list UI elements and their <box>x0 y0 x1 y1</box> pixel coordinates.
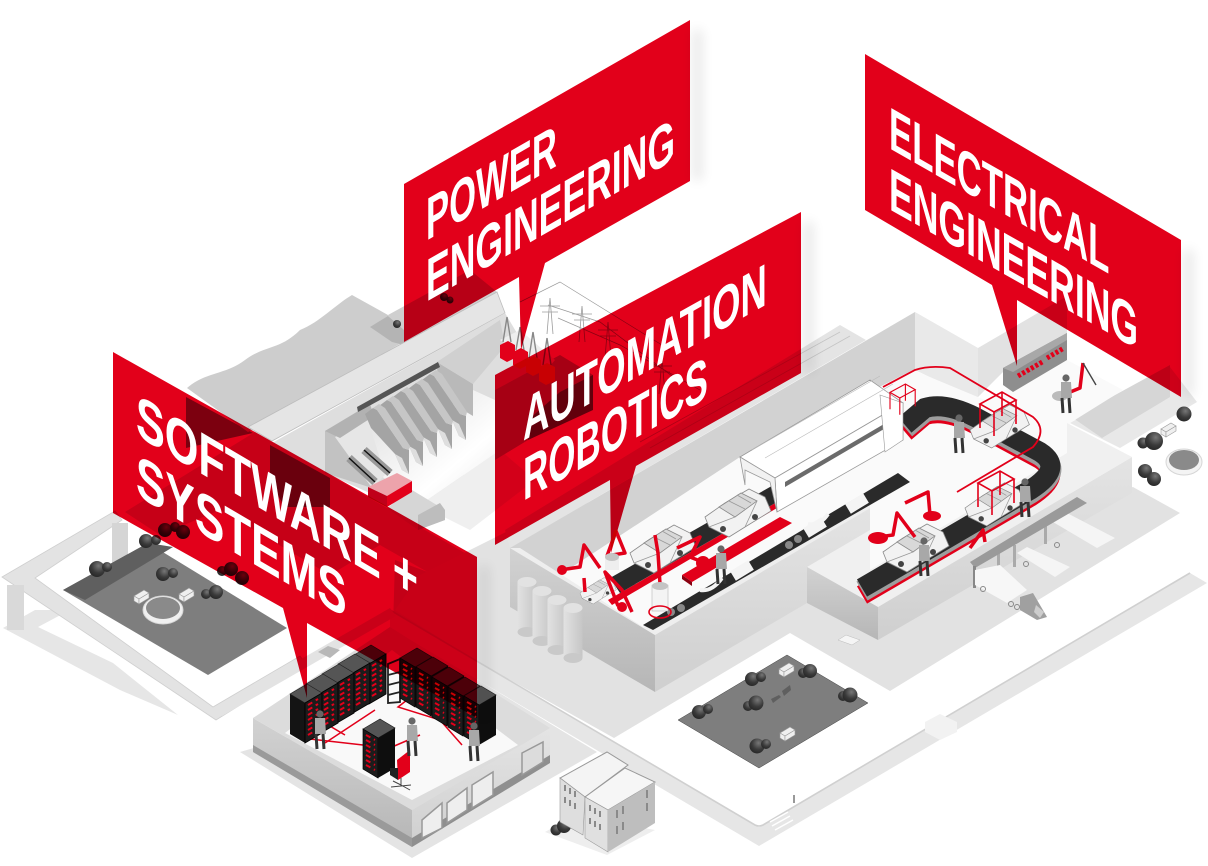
left wall <box>253 718 412 847</box>
staff <box>315 710 326 749</box>
perimeter road <box>390 573 1207 846</box>
silos <box>518 577 582 663</box>
heading: automation robotics: AUTOMATION <box>523 250 767 454</box>
ground under software banner <box>125 397 477 700</box>
right block <box>585 768 655 810</box>
parked car <box>318 646 340 658</box>
banner: software + systems <box>113 352 477 718</box>
robot arms hall A <box>560 531 705 612</box>
racks left row <box>354 645 386 704</box>
heading: electrical engineering: ENGINEERING <box>889 155 1138 363</box>
factory floor <box>560 360 1123 627</box>
left block <box>560 752 628 797</box>
heading: power engineering: ENGINEERING <box>426 104 675 315</box>
conveyor loop <box>862 406 1050 595</box>
substation and power lines <box>500 282 700 394</box>
tunnel <box>740 376 903 512</box>
conveyor: assembly line with car bodies <box>580 483 777 605</box>
heading: software + systems: SYSTEMS <box>136 441 347 631</box>
factory outer walls <box>510 423 1132 692</box>
office chair <box>390 750 411 790</box>
right wall <box>412 728 550 847</box>
vehicles on loop <box>883 405 1029 572</box>
heading: software + systems: SOFTWARE + <box>136 381 418 614</box>
road across dam <box>248 292 505 441</box>
garage doors <box>422 803 442 838</box>
petrol station <box>970 497 1115 603</box>
truck <box>1008 593 1047 620</box>
tunnel end cap <box>880 395 903 452</box>
open frame <box>388 659 400 703</box>
banner edge shadows <box>481 30 1192 716</box>
robot bases hall A <box>557 545 727 618</box>
overhead rail and cages <box>883 367 1040 515</box>
left road loop and ramp supports <box>2 511 306 720</box>
park: centre <box>678 655 868 768</box>
white spillway <box>345 375 500 505</box>
stepped concrete under automation banner <box>495 355 593 460</box>
building plate <box>240 680 597 858</box>
centre rack <box>363 719 395 778</box>
heading: power engineering: POWER <box>426 112 557 254</box>
cabling <box>310 690 462 750</box>
software building <box>240 627 597 858</box>
heading: electrical engineering: ELECTRICAL <box>889 94 1109 287</box>
main ground plate <box>395 400 1180 738</box>
east block plate <box>1070 365 1197 448</box>
roof rim <box>253 627 550 810</box>
floor <box>285 650 518 800</box>
small forklift <box>838 635 860 645</box>
road link to west <box>216 608 396 716</box>
east wall block <box>978 296 1067 397</box>
buttresses <box>422 370 467 440</box>
lower stepped structure <box>387 490 445 530</box>
dam side blocks <box>325 419 372 488</box>
robots hall B <box>878 363 1083 548</box>
pond <box>143 596 183 624</box>
park: left with pond <box>63 522 287 675</box>
ground below <box>272 313 540 520</box>
electrical cabinets <box>1003 333 1067 392</box>
banner: power engineering <box>404 20 690 350</box>
dam and lake <box>187 270 540 530</box>
apartment buildings <box>545 752 655 855</box>
red pallet <box>682 517 792 586</box>
lake <box>187 295 403 432</box>
factory back wall <box>505 312 978 575</box>
east trees and pond <box>1138 406 1202 486</box>
conveyor: parts line <box>643 473 910 630</box>
robot pedestals and workers <box>868 363 1096 576</box>
heading: automation robotics: ROBOTICS <box>523 343 708 514</box>
racks right row <box>400 648 432 707</box>
banner: electrical engineering <box>865 54 1181 397</box>
spillway chutes <box>349 450 390 482</box>
banner: automation robotics <box>495 212 801 553</box>
red gate house <box>368 473 412 507</box>
